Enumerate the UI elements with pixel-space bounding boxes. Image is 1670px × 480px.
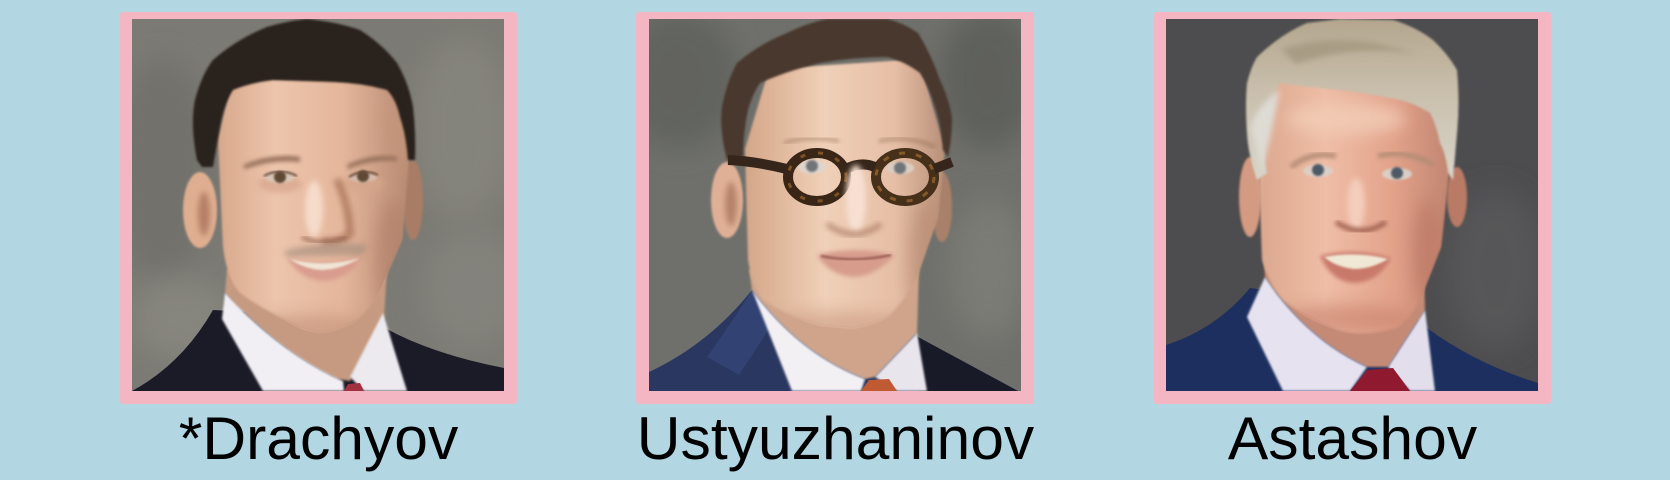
panel: Astashov	[1154, 12, 1551, 472]
portrait: Drachyov	[112, 19, 522, 391]
portrait: Ustyuzhaninov	[649, 19, 1021, 391]
panel: Ustyuzhaninov	[636, 12, 1034, 472]
portrait frame: Drachyov	[120, 12, 517, 404]
name: Astashov: Astashov	[1228, 404, 1477, 472]
portrait frame: Astashov	[1154, 12, 1551, 404]
name: Ustyuzhaninov: Ustyuzhaninov	[637, 404, 1034, 472]
panel: Drachyov	[120, 12, 517, 472]
portrait frame: Ustyuzhaninov	[636, 12, 1034, 404]
name: Drachyov: *Drachyov	[179, 404, 458, 472]
portrait: Astashov	[1166, 19, 1546, 391]
